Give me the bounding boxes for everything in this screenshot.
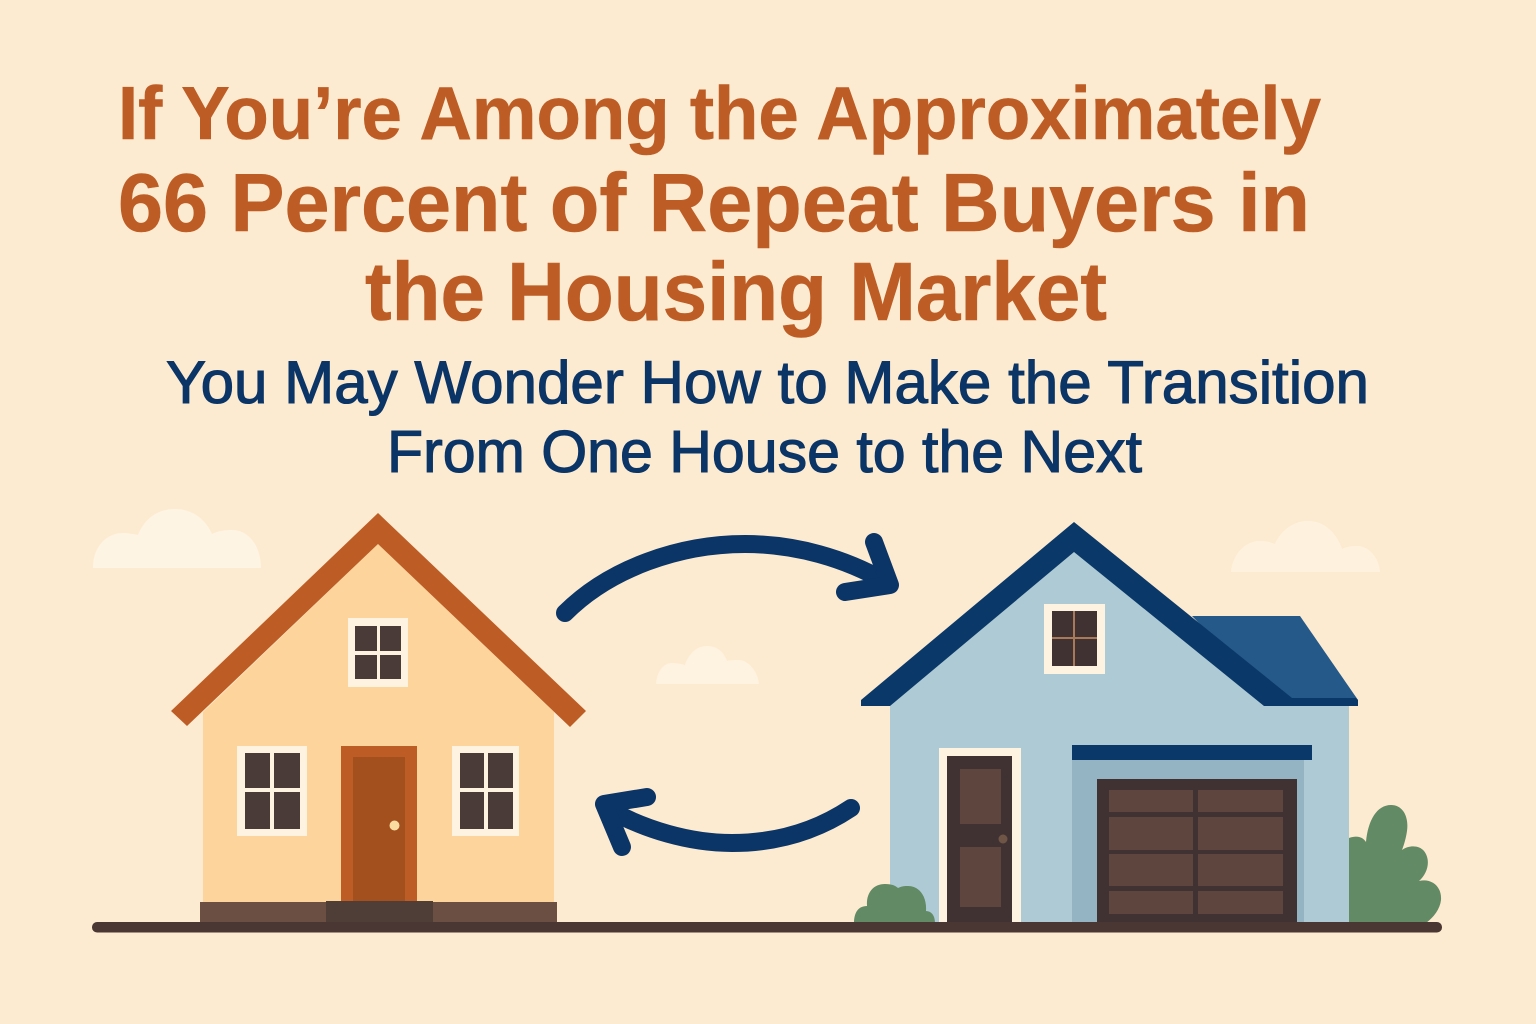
wall xyxy=(203,544,554,902)
cloud: top left xyxy=(93,509,261,568)
title: the Housing Market xyxy=(365,245,1107,338)
arrow: bottom, right house to left house xyxy=(604,797,851,847)
roof xyxy=(171,513,586,727)
attic window xyxy=(1044,604,1105,674)
title: 66 Percent of Repeat Buyers in xyxy=(118,156,1310,249)
title xyxy=(118,71,1321,338)
right window xyxy=(452,746,519,836)
cloud: middle xyxy=(656,646,759,684)
subtitle xyxy=(166,349,1369,485)
bush: right xyxy=(1349,805,1441,923)
subtitle: From One House to the Next xyxy=(387,419,1142,485)
garage recess xyxy=(1072,760,1304,923)
wall xyxy=(890,551,1349,923)
subtitle: You May Wonder How to Make the Transition xyxy=(166,349,1369,416)
door xyxy=(341,746,417,903)
front step xyxy=(326,901,433,925)
door xyxy=(939,748,1021,923)
cloud: top right xyxy=(1231,521,1380,572)
arrow: top, left house to right house xyxy=(565,542,890,613)
attic window xyxy=(348,618,408,687)
bush: left xyxy=(854,884,935,923)
title: If You’re Among the Approximately xyxy=(118,71,1321,155)
garage lintel xyxy=(1072,745,1312,760)
main roof xyxy=(861,522,1358,706)
house: left, orange xyxy=(171,513,586,925)
garage door xyxy=(1097,779,1297,923)
house: right, blue xyxy=(854,522,1441,923)
ground line xyxy=(92,922,1442,932)
left window xyxy=(237,746,307,836)
foundation xyxy=(200,902,557,923)
garage roof xyxy=(1192,616,1358,706)
